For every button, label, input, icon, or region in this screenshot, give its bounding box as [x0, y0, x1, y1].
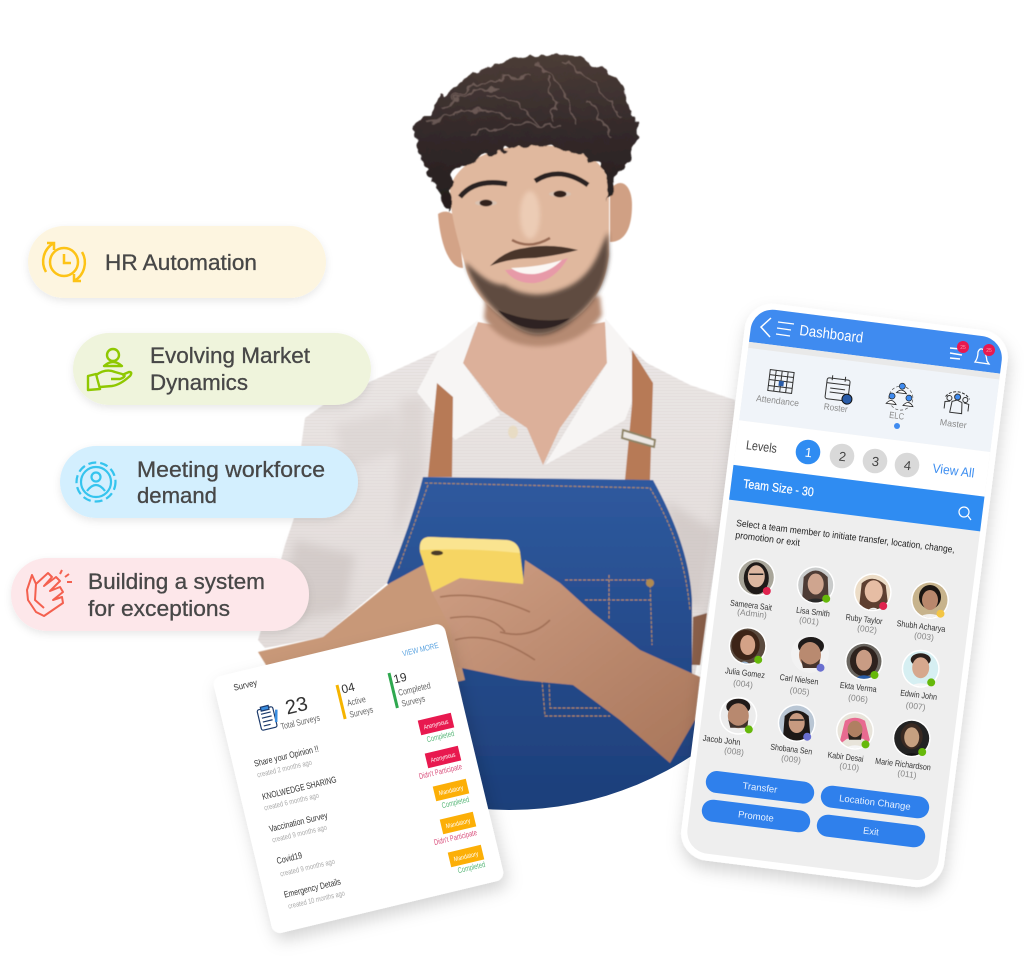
team member names: Shobana Sen — [770, 742, 813, 757]
apron stitching — [398, 483, 690, 716]
finger creases — [440, 595, 550, 660]
team member ids — [724, 607, 935, 780]
eyebrows — [460, 183, 507, 197]
team member ids: (003) — [914, 630, 935, 643]
menu: attendance: Attendance — [756, 393, 800, 408]
text: Building a system for exceptions: Building a system — [88, 569, 265, 594]
survey list — [253, 744, 346, 911]
ears — [438, 212, 463, 268]
survey list: Vaccination Survey — [268, 810, 329, 834]
survey list: created 9 months ago — [271, 823, 328, 844]
survey status tags: Completed — [426, 729, 455, 744]
avatar: Shobana Sen — [778, 704, 816, 742]
levels selector: 1 — [804, 445, 813, 460]
shirt weave texture — [258, 325, 735, 700]
survey status tags: Mandatory — [453, 851, 480, 863]
team member names — [702, 598, 946, 772]
menu: roster — [823, 375, 855, 415]
photo: smiling man in denim apron holding a phone — [258, 53, 735, 830]
text: HR Automation: HR Automation — [105, 250, 257, 275]
team member names: Edwin John — [900, 688, 938, 702]
avatar: Jacob John — [719, 697, 757, 735]
stat: active surveys: Active — [346, 694, 367, 708]
left forearm and hand — [258, 564, 466, 682]
action buttons — [701, 770, 930, 849]
levels selector — [745, 437, 975, 481]
icon: task list with badge — [950, 341, 969, 359]
icon: clock with circular arrows — [43, 243, 85, 281]
beard — [465, 232, 609, 335]
stat: active surveys: Surveys — [348, 704, 374, 720]
survey list: Emergency Details — [283, 876, 342, 900]
card background — [212, 622, 505, 935]
survey status tags: Mandatory — [445, 818, 472, 830]
shirt — [258, 325, 735, 700]
survey status tags: Anonymous — [423, 719, 450, 731]
icon: bell with badge — [975, 344, 995, 364]
icon: clipboard — [256, 704, 280, 731]
icon: search — [959, 507, 971, 520]
team member ids: (005) — [789, 685, 810, 697]
survey list: created 10 months ago — [287, 888, 346, 911]
survey status tags: Didn't Participate — [433, 828, 478, 847]
survey list: created 2 months ago — [256, 758, 313, 779]
avatar: Ekta Verma — [845, 642, 883, 681]
pill: HR Automation — [28, 226, 326, 298]
stat: active surveys: 04 — [340, 680, 357, 696]
survey list: Share your Opinion !! — [253, 744, 320, 769]
team member ids: (010) — [839, 761, 860, 773]
pill: Meeting workforce demand — [60, 446, 358, 518]
team member names: Lisa Smith — [796, 605, 831, 619]
survey list: created 9 months ago — [279, 857, 336, 878]
neck — [463, 322, 607, 465]
stat: completed surveys: Completed — [397, 680, 432, 698]
header: back, menu and title: Dashboard — [799, 322, 864, 347]
menu: master: Master — [939, 417, 967, 430]
survey list: Covid19 — [275, 850, 303, 866]
icon: hand holding person — [88, 349, 131, 390]
team member names: Kabir Desai — [827, 750, 864, 764]
team member ids: (001) — [799, 615, 820, 627]
nose highlight — [520, 191, 540, 239]
yellow phone — [420, 537, 524, 592]
pocket rivet — [646, 579, 654, 587]
menu: master — [939, 390, 971, 430]
stat: total surveys: 23 — [283, 693, 310, 719]
strap buckle — [622, 430, 655, 447]
team member names: Jacob John — [702, 733, 741, 747]
panel: phone dashboard — [678, 300, 1011, 890]
icon: clapping hands — [27, 570, 72, 616]
text: Meeting workforce demand: Meeting workforce — [137, 457, 325, 482]
survey status tags: Mandatory — [438, 785, 465, 797]
stat: total surveys: Total Surveys — [280, 712, 321, 732]
hair — [413, 53, 637, 213]
team member names: Ruby Taylor — [845, 612, 883, 626]
team member names: Carl Nielsen — [779, 672, 819, 687]
team member ids: (007) — [905, 700, 926, 712]
nose shadow — [512, 238, 550, 245]
avatar: Lisa Smith — [797, 566, 835, 605]
stat: total surveys — [280, 693, 321, 732]
team member names: Ekta Verma — [839, 680, 878, 694]
avatar: Kabir Desai — [836, 712, 874, 751]
survey list: created 6 months ago — [263, 791, 320, 812]
icon: bell with badge: 25 — [986, 348, 992, 354]
levels selector: View All — [932, 461, 975, 481]
levels selector: 3 — [871, 454, 880, 469]
pill: Building a system for exceptions — [11, 558, 309, 631]
heading: survey: Survey — [232, 677, 259, 693]
text: Evolving Market Dynamics: Dynamics — [150, 370, 248, 395]
menu: roster: Roster — [823, 401, 848, 414]
levels selector: Levels — [745, 437, 778, 456]
mouth — [505, 258, 568, 283]
survey status tags: Completed — [441, 795, 470, 810]
neck shadow — [484, 296, 602, 346]
text: Meeting workforce demand: demand — [137, 483, 217, 508]
levels selector: 2 — [838, 449, 847, 464]
icon: gear with person — [76, 462, 116, 502]
eyes — [475, 191, 571, 206]
team member ids: (009) — [781, 753, 802, 765]
avatar: Carl Nielsen — [798, 637, 824, 672]
header: back, menu and title — [761, 318, 864, 347]
avatar: Shubh Acharya — [911, 581, 949, 620]
stat: completed surveys: 19 — [392, 670, 409, 686]
chin beard core — [498, 310, 570, 329]
action buttons: Exit — [862, 826, 880, 838]
arm behind apron — [692, 613, 707, 665]
avatar: Marie Richardson — [893, 719, 931, 758]
survey status tags: Didn't Participate — [418, 762, 463, 781]
stat: completed surveys: Surveys — [400, 693, 426, 709]
team member ids: (011) — [897, 768, 917, 780]
phone body — [678, 300, 1011, 890]
team member ids: (006) — [848, 692, 869, 705]
avatar: Sameera Sait — [737, 558, 775, 596]
survey status tags: Completed — [457, 860, 486, 875]
team member names: Sameera Sait — [730, 598, 773, 613]
menu: ELC — [884, 382, 916, 423]
pill: Evolving Market Dynamics — [73, 333, 371, 405]
stat: active surveys — [336, 680, 374, 720]
denim apron — [387, 477, 700, 830]
menu: ELC: ELC — [889, 410, 905, 422]
avatar: Julia Gomez — [729, 627, 767, 666]
collar — [417, 320, 500, 440]
survey list: KNOLWEDGE SHARING — [261, 774, 337, 802]
link: view more: VIEW MORE — [401, 641, 439, 658]
survey status tags — [418, 713, 486, 875]
moustache — [490, 246, 578, 266]
avatar: Ruby Taylor — [854, 573, 892, 612]
team member names: Julia Gomez — [725, 665, 766, 680]
survey status tags: Anonymous — [430, 752, 457, 764]
text: Building a system for exceptions: for exceptions — [88, 596, 230, 621]
face — [450, 145, 609, 334]
panel: survey card — [212, 622, 505, 935]
team member names: Shubh Acharya — [896, 618, 946, 634]
active menu indicator — [894, 423, 900, 429]
action buttons: Promote — [737, 809, 774, 825]
team member ids: (002) — [857, 623, 878, 635]
avatar: Edwin John — [902, 650, 940, 689]
shirt shading — [275, 395, 715, 625]
stat: completed surveys — [388, 670, 432, 709]
team size bar text: Team Size - 30 — [742, 477, 815, 499]
instruction text: promotion or exit — [735, 530, 801, 549]
instruction text: Select a team member to initiate transfer, location, change, — [736, 518, 955, 556]
action buttons: Transfer — [742, 781, 778, 796]
icon: task list with badge: 25 — [960, 345, 966, 351]
team member ids: (004) — [733, 678, 754, 690]
levels selector: 4 — [903, 458, 912, 473]
hair highlights — [425, 62, 622, 140]
team member names: Marie Richardson — [875, 756, 932, 772]
menu: attendance — [756, 368, 803, 408]
text: Evolving Market Dynamics: Evolving Market — [150, 343, 310, 368]
team member ids: (008) — [724, 745, 745, 758]
placket button — [508, 426, 518, 438]
right hand and forearm — [432, 560, 700, 763]
action buttons: Location Change — [839, 793, 911, 813]
apron straps — [428, 383, 453, 477]
team member ids: (Admin) — [737, 607, 768, 620]
